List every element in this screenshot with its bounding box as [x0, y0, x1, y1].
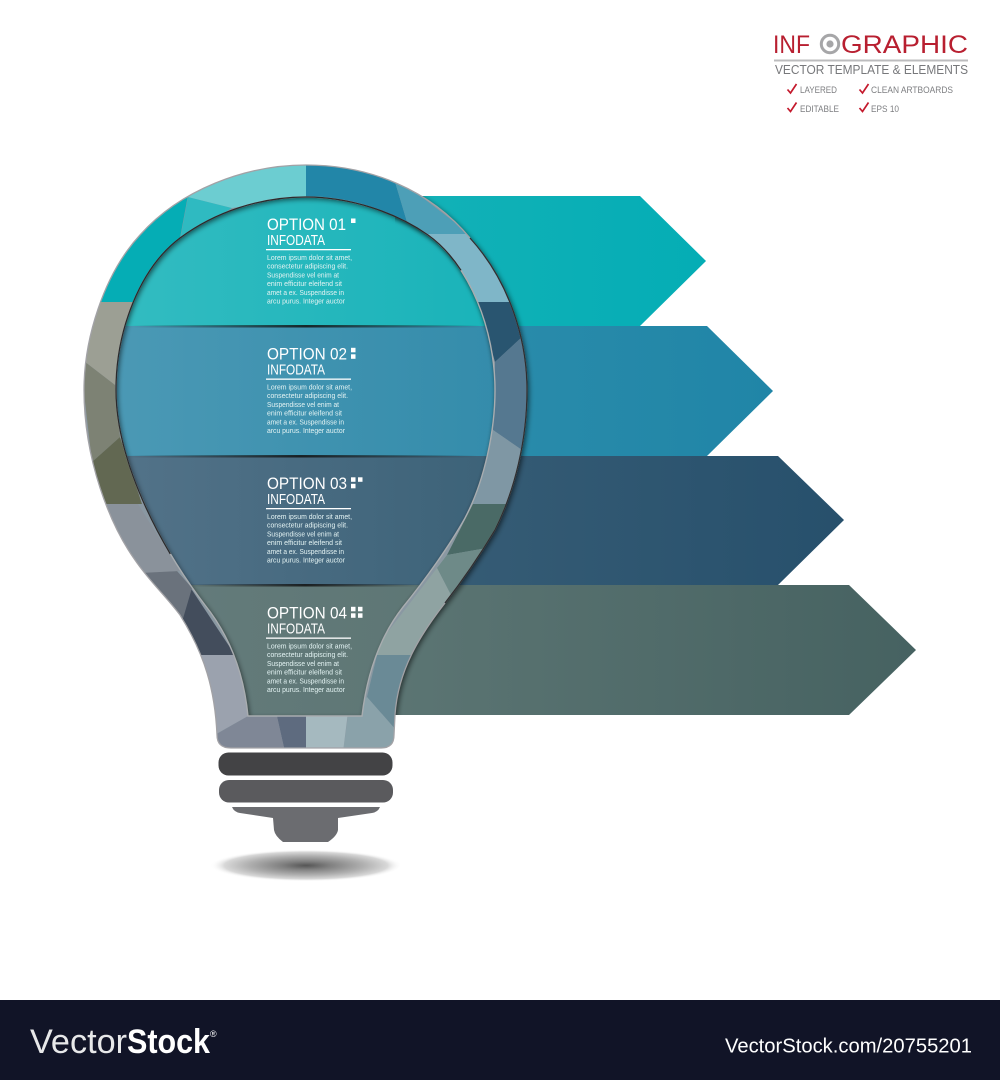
option 03 text: consectetur adipiscing elit. — [267, 521, 348, 530]
option 04 text: enim efficitur eleifend sit — [267, 668, 343, 677]
option 03 text: OPTION 03 — [267, 474, 347, 493]
feature checklist — [788, 84, 953, 115]
option 01 text: amet a ex. Suspendisse in — [267, 288, 344, 297]
option 04 text: INFODATA — [267, 622, 325, 638]
logo wordmark: INF — [773, 31, 810, 59]
option 02 text: Suspendisse vel enim at — [267, 400, 340, 409]
option 04 text: Lorem ipsum dolor sit amet, — [267, 642, 352, 650]
arrow 2 — [306, 326, 773, 456]
footer logo: Stock — [127, 1023, 210, 1061]
option 01 text: OPTION 01 — [267, 215, 346, 234]
feature checklist: LAYERED — [800, 85, 837, 96]
ring shadow on arrows — [395, 196, 532, 715]
footer image id: VectorStock.com/20755201 — [725, 1036, 972, 1058]
bulb outlines — [84, 165, 527, 748]
arrow 1 — [306, 196, 706, 326]
option 02 text: amet a ex. Suspendisse in — [267, 417, 344, 426]
option 04 text: consectetur adipiscing elit. — [267, 650, 348, 659]
footer bar — [0, 1000, 1000, 1080]
option 03 text: arcu purus. Integer auctor — [267, 556, 345, 564]
option 01 text: Lorem ipsum dolor sit amet, — [267, 253, 352, 262]
option 02 text: arcu purus. Integer auctor — [267, 426, 345, 435]
option 02 text: consectetur adipiscing elit. — [267, 391, 348, 400]
bulb screw base — [218, 752, 393, 842]
option 04 text: Suspendisse vel enim at — [267, 659, 340, 668]
logo wordmark — [773, 31, 968, 59]
feature checklist: EPS 10 — [871, 104, 899, 115]
arrow 3 — [306, 456, 844, 585]
option 03 text: Suspendisse vel enim at — [267, 529, 340, 538]
bulb ground shadow — [210, 850, 402, 882]
arrow 4 — [306, 585, 916, 715]
option 02 text — [266, 344, 356, 435]
logo subtitle: VECTOR TEMPLATE & ELEMENTS — [775, 63, 968, 77]
feature checklist: EDITABLE — [800, 104, 839, 115]
option 01 text: INFODATA — [267, 233, 325, 249]
option 03 text: amet a ex. Suspendisse in — [267, 547, 344, 556]
feature checklist: CLEAN ARTBOARDS — [871, 85, 953, 96]
option 01 text: enim efficitur eleifend sit — [267, 279, 343, 288]
option 04 text: OPTION 04 — [267, 604, 347, 622]
logo wordmark: GRAPHIC — [841, 31, 968, 59]
arrows — [306, 196, 916, 715]
option 02 text: enim efficitur eleifend sit — [267, 409, 343, 418]
footer logo: ® — [210, 1029, 217, 1039]
option 03 text: INFODATA — [267, 492, 325, 508]
footer logo: Vector — [30, 1023, 127, 1061]
footer logo — [30, 1023, 217, 1061]
option 04 text — [266, 604, 362, 694]
option 01 text: arcu purus. Integer auctor — [267, 296, 345, 306]
bulb interior bands — [116, 198, 494, 716]
option 03 text: enim efficitur eleifend sit — [267, 538, 343, 547]
option 04 text: arcu purus. Integer auctor — [267, 685, 345, 694]
option 04 text: amet a ex. Suspendisse in — [267, 676, 344, 685]
bulb faceted ring — [84, 166, 526, 748]
option 01 text — [266, 215, 356, 306]
option 03 text: Lorem ipsum dolor sit amet, — [267, 512, 352, 521]
logo block: infographic vector template — [773, 31, 968, 115]
option 02 text: INFODATA — [267, 362, 325, 378]
option 02 text: Lorem ipsum dolor sit amet, — [267, 382, 352, 392]
option 01 text: Suspendisse vel enim at — [267, 270, 340, 279]
option 03 text — [266, 474, 362, 564]
option 01 text: consectetur adipiscing elit. — [267, 262, 348, 271]
option 02 text: OPTION 02 — [267, 344, 347, 364]
